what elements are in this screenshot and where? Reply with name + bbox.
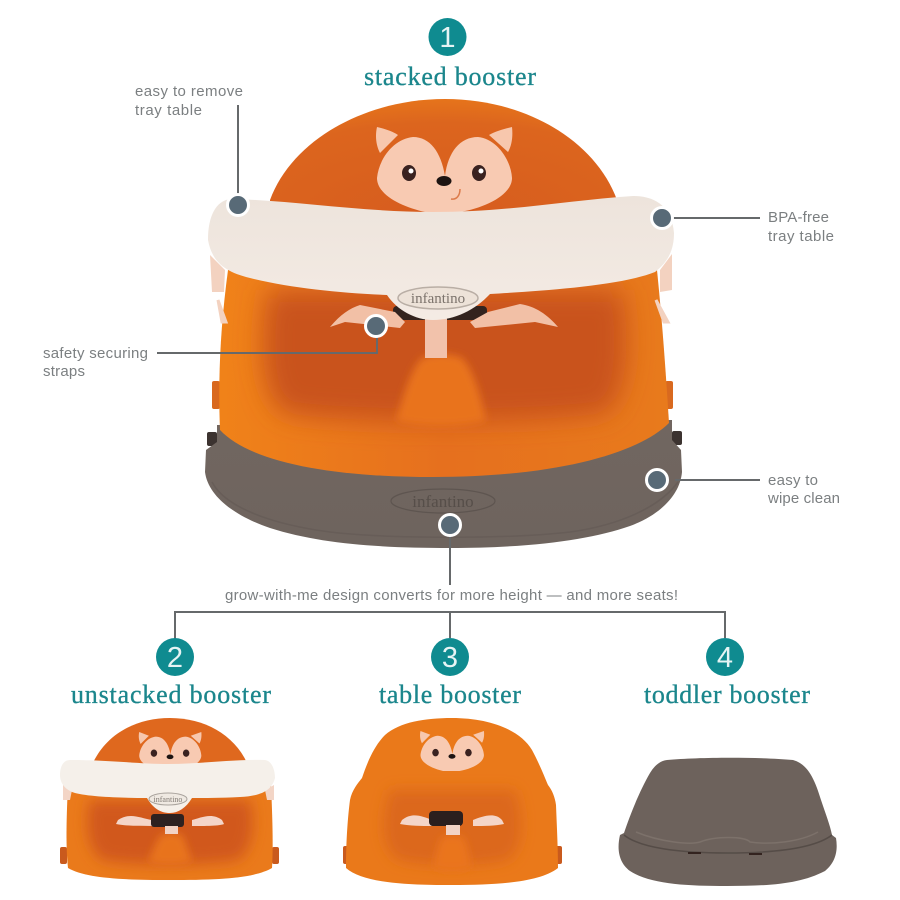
illustration: unstacked seat [60,718,279,880]
callout: easy to remove tray table: tray table [135,102,202,119]
badge 4: 4 [717,642,733,674]
heading: unstacked booster: unstacked booster [71,680,271,709]
callout: BPA-free tray table: tray table [768,228,834,245]
seat interior [263,290,626,421]
callout: easy to wipe clean [767,472,840,507]
callout: safety securing straps: safety securing [43,345,148,362]
heading: toddler booster: toddler booster [644,680,810,709]
caption: grow-with-me design: grow-with-me design converts for more height — and more seats! [225,587,678,604]
side clips [212,381,673,409]
tray legs [210,254,672,322]
illustration: toddler seat [619,758,837,886]
pommel [396,354,486,426]
seat back dome [270,99,617,240]
base clips [207,431,682,446]
badge 2 [156,638,194,676]
number badge 1: 1 [439,22,456,54]
illustration: stacked booster seat [205,99,682,548]
base rim [212,482,678,537]
heading: stacked booster: stacked booster [364,62,536,91]
badge 4 [706,638,744,676]
grey base [205,420,682,548]
callout: BPA-free tray table: BPA-free [768,209,829,226]
callout: easy to wipe clean: easy to [768,472,818,489]
callout: easy to remove tray table [135,83,243,119]
heading: table booster: table booster [379,680,521,709]
fox face [376,127,512,212]
base logo: infantino [412,492,474,511]
panel: table booster [343,638,562,885]
callout: safety securing straps [43,345,148,380]
number badge 1 [428,18,466,56]
callout dots [228,194,672,536]
tray table [208,196,674,320]
badge 3: 3 [442,642,458,674]
panel: toddler booster [619,638,837,886]
callout: safety securing straps: straps [43,363,85,380]
illustration: table seat [343,718,562,885]
orange seat body [219,270,669,477]
tray logo [398,287,478,309]
callout: easy to wipe clean: wipe clean [767,490,840,507]
illustration: unstacked seat: infantino [154,795,182,804]
tree connector [175,612,725,640]
tray logo: infantino [411,291,465,307]
panel: unstacked booster [60,638,279,880]
badge 3 [431,638,469,676]
callout: easy to remove tray table: easy to remove [135,83,243,100]
badge 2: 2 [167,642,183,674]
harness straps [330,304,558,358]
callout: BPA-free tray table [768,209,834,245]
callout lines [157,105,760,585]
base logo [391,489,495,513]
panel: stacked booster heading [364,18,536,91]
